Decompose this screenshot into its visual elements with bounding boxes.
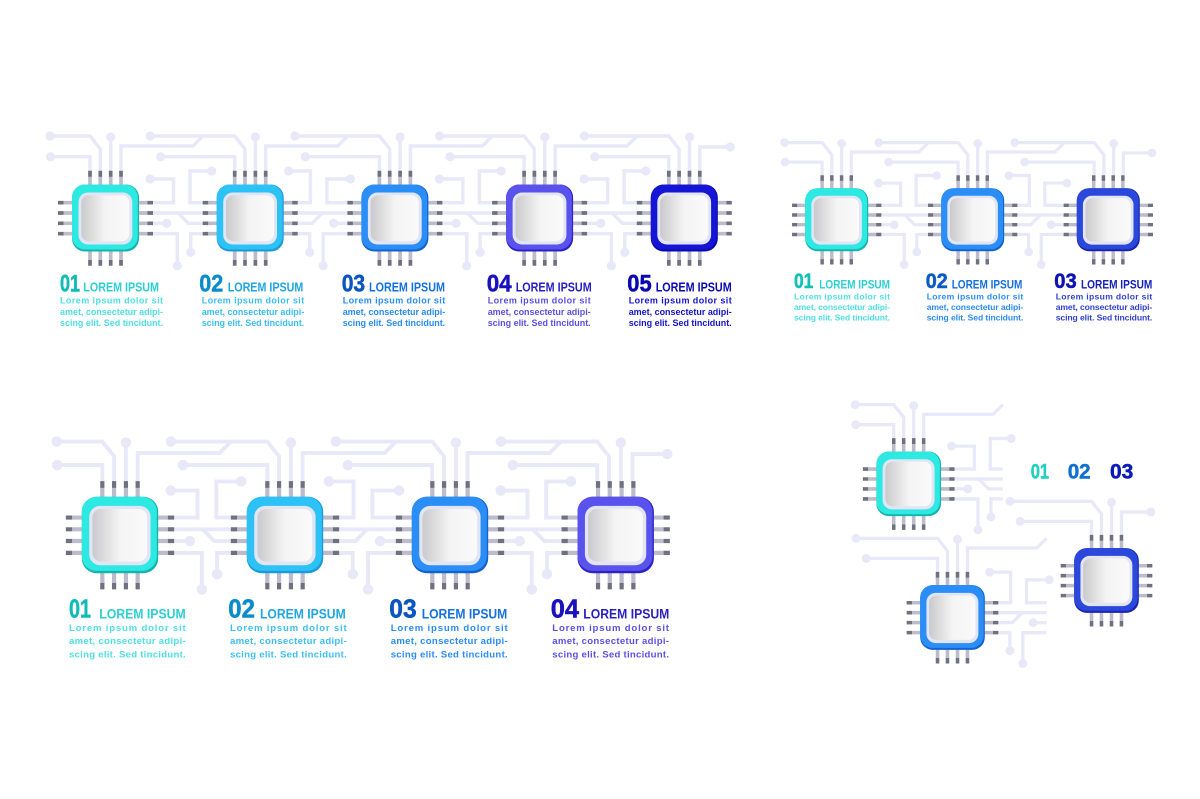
text block: step 03: Lorem ipsum dolor sit: [391, 623, 508, 634]
text block: step 05: scing elit. Sed tincidunt.: [629, 318, 732, 328]
icon: chip 04: [562, 481, 670, 589]
text block: step 02: Lorem ipsum dolor sit: [927, 291, 1023, 301]
text block: step 02: amet, consectetur adipi-: [202, 307, 304, 317]
text block: step 02: scing elit. Sed tincidunt.: [230, 649, 347, 660]
text block: step 03: scing elit. Sed tincidunt.: [343, 318, 445, 328]
circuit traces: chip 03 group: [1006, 497, 1155, 535]
text block: step 04: [551, 594, 670, 660]
text block: step 03: LOREM IPSUM: [1081, 277, 1152, 291]
text block: step 05: LOREM IPSUM: [656, 280, 732, 295]
text block: step 02: scing elit. Sed tincidunt.: [927, 313, 1023, 323]
text block: step 01: 01: [60, 271, 80, 298]
text block: step 01: amet, consectetur adipi-: [794, 302, 890, 312]
text block: step 04: Lorem ipsum dolor sit: [488, 295, 591, 305]
text block: step 01: scing elit. Sed tincidunt.: [69, 649, 186, 660]
text block: step 04: [487, 271, 592, 328]
text block: step 03: amet, consectetur adipi-: [391, 636, 508, 647]
text block: step 04: scing elit. Sed tincidunt.: [552, 649, 669, 660]
icon: chip 01: [58, 171, 153, 266]
text block: step 02: amet, consectetur adipi-: [230, 636, 347, 647]
text block: step 04: LOREM IPSUM: [583, 606, 669, 621]
text block: step 02: Lorem ipsum dolor sit: [230, 623, 347, 634]
text block: step 02: 02: [199, 271, 223, 298]
text block: step 01: scing elit. Sed tincidunt.: [794, 313, 890, 323]
text block: step 02: [228, 594, 347, 660]
text block: step 03: [389, 594, 508, 660]
text block: step 04: Lorem ipsum dolor sit: [552, 623, 670, 634]
text block: step 04: scing elit. Sed tincidunt.: [488, 318, 591, 328]
icon: chip 01: [66, 481, 174, 589]
text block: step 03: LOREM IPSUM: [369, 280, 445, 295]
icon: chip 04: [492, 171, 587, 266]
icon: chip 03: [396, 481, 504, 589]
text block: step 01: Lorem ipsum dolor sit: [794, 291, 890, 301]
text block: step 03: scing elit. Sed tincidunt.: [391, 649, 508, 660]
text block: step 05: Lorem ipsum dolor sit: [629, 295, 732, 305]
text block: step 03: 03: [389, 594, 417, 624]
text block: step 02: [926, 270, 1023, 323]
text block: step 01: amet, consectetur adipi-: [60, 307, 163, 317]
text block: step 03: 03: [1054, 270, 1077, 293]
text block: step 03: Lorem ipsum dolor sit: [1056, 291, 1152, 301]
circuit traces: four-step row: [51, 436, 673, 595]
text block: step 05: amet, consectetur adipi-: [629, 307, 732, 317]
circuit traces: chip 02 group: [852, 534, 1054, 668]
circuit traces: chip 01 group: [851, 400, 1016, 534]
text block: step 02: LOREM IPSUM: [952, 277, 1022, 291]
text block: step 02: LOREM IPSUM: [260, 606, 346, 621]
text block: step 01: [794, 270, 890, 323]
text block: step 04: 04: [487, 271, 512, 298]
number labels: [1031, 460, 1133, 483]
text block: step 04: amet, consectetur adipi-: [488, 307, 591, 317]
text block: step 03: [342, 271, 445, 328]
text block: step 05: [627, 271, 732, 328]
panel: scattered three chips: [851, 400, 1155, 668]
text block: step 04: 04: [551, 594, 580, 624]
icon: chip 02: [203, 171, 298, 266]
icon: chip 02: [907, 572, 998, 664]
text block: step 01: LOREM IPSUM: [819, 277, 890, 291]
circuit traces: three-step row: [780, 138, 1156, 269]
text block: step 02: LOREM IPSUM: [228, 280, 303, 295]
text block: step 01: scing elit. Sed tincidunt.: [60, 318, 163, 328]
icon: chip 03: [347, 171, 442, 266]
panel: three-step chip row: [780, 138, 1156, 323]
text block: step 01: Lorem ipsum dolor sit: [60, 295, 163, 305]
text block: step 03: Lorem ipsum dolor sit: [343, 295, 445, 305]
text block: step 01: Lorem ipsum dolor sit: [69, 623, 186, 634]
text block: step 01: 01: [69, 594, 91, 624]
icon: chip 01: [863, 438, 955, 530]
text block: step 01: LOREM IPSUM: [83, 280, 159, 295]
text block: step 01: [69, 594, 186, 660]
text block: step 02: scing elit. Sed tincidunt.: [202, 318, 304, 328]
text block: step 05: 05: [627, 271, 652, 298]
text block: step 01: amet, consectetur adipi-: [69, 636, 186, 647]
icon: chip 03: [1064, 175, 1153, 265]
number labels: 03: [1110, 460, 1133, 483]
icon: chip 03: [1061, 535, 1152, 627]
text block: step 04: amet, consectetur adipi-: [552, 636, 669, 647]
text block: step 03: [1054, 270, 1152, 323]
text block: step 02: 02: [926, 270, 948, 293]
text block: step 03: scing elit. Sed tincidunt.: [1056, 313, 1152, 323]
text block: step 03: amet, consectetur adipi-: [1056, 302, 1152, 312]
number labels: 02: [1068, 460, 1091, 483]
icon: chip 02: [231, 481, 339, 589]
text block: step 03: LOREM IPSUM: [422, 606, 507, 621]
panel: five-step chip row: [45, 131, 735, 328]
icon: chip 01: [792, 175, 881, 265]
text block: step 02: 02: [228, 594, 255, 624]
text block: step 01: LOREM IPSUM: [99, 606, 186, 621]
circuit traces: five-step row: [45, 131, 735, 270]
number labels: 01: [1031, 460, 1049, 483]
text block: step 01: 01: [794, 270, 814, 293]
text block: step 02: amet, consectetur adipi-: [927, 302, 1023, 312]
panel: four-step chip row: [51, 436, 673, 660]
text block: step 01: [60, 271, 163, 328]
text block: step 04: LOREM IPSUM: [516, 280, 592, 295]
icon: chip 02: [928, 175, 1017, 265]
text block: step 03: 03: [342, 271, 365, 298]
icon: chip 05: [637, 171, 732, 266]
text block: step 03: amet, consectetur adipi-: [343, 307, 445, 317]
text block: step 02: [199, 271, 304, 328]
text block: step 02: Lorem ipsum dolor sit: [202, 295, 304, 305]
